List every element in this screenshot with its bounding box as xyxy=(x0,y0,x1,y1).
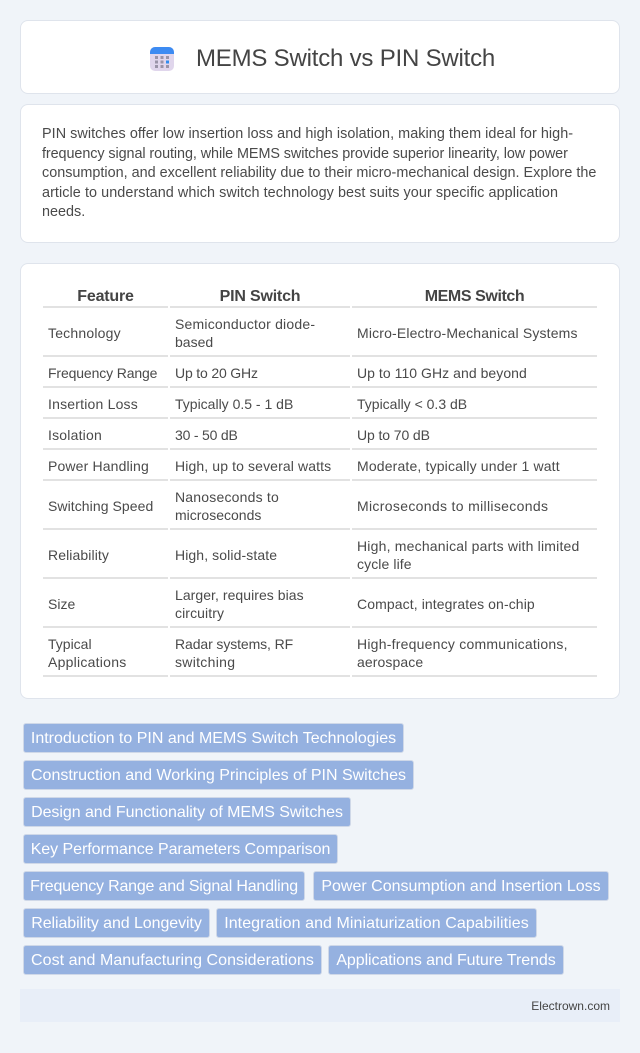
comparison table: Compact, integrates on-chip xyxy=(357,596,535,612)
chip: Design and Functionality of MEMS Switches xyxy=(31,804,343,821)
icon: calendar xyxy=(150,47,174,71)
row: power handling: Power Handling xyxy=(48,458,149,474)
comparison table: Radar systems, RF xyxy=(175,636,293,652)
chip xyxy=(216,908,537,938)
intro text: consumption, and excellent reliability due to their micro-mechanical design. Explore the xyxy=(42,165,596,181)
chip xyxy=(313,871,609,901)
intro text: needs. xyxy=(42,204,85,220)
chip: Power Consumption and Insertion Loss xyxy=(321,878,601,895)
row: typical applications xyxy=(48,636,126,670)
intro text: frequency signal routing, while MEMS switches provide superior linearity, low power xyxy=(42,146,568,162)
comparison table: High-frequency communications, xyxy=(357,636,568,652)
footer credit: Electrown.com xyxy=(531,999,610,1013)
chip xyxy=(23,945,322,975)
intro text: PIN switches offer low insertion loss and high isolation, making them ideal for high- xyxy=(42,126,573,142)
topic chips xyxy=(23,723,609,975)
title: MEMS Switch vs PIN Switch xyxy=(196,45,495,72)
comparison table: 30 - 50 dB xyxy=(175,427,238,443)
chip: Introduction to PIN and MEMS Switch Technologies xyxy=(31,730,396,747)
chip xyxy=(23,834,338,864)
comparison table: Micro-Electro-Mechanical Systems xyxy=(357,325,578,341)
row: size: Size xyxy=(48,596,75,612)
footer xyxy=(20,989,620,1022)
chip: Construction and Working Principles of PIN Switches xyxy=(31,767,406,784)
comparison table: circuitry xyxy=(175,605,224,621)
comparison table: Up to 110 GHz and beyond xyxy=(357,365,527,381)
row: isolation: Isolation xyxy=(48,427,102,443)
comparison table: Microseconds to milliseconds xyxy=(357,498,548,514)
row: switching speed: Switching Speed xyxy=(48,498,153,514)
chip: Key Performance Parameters Comparison xyxy=(31,841,330,858)
comparison table: Larger, requires bias xyxy=(175,587,304,603)
comparison table: High, mechanical parts with limited xyxy=(357,538,580,554)
comparison table: Moderate, typically under 1 watt xyxy=(357,458,560,474)
row: typical applications: Typical xyxy=(48,636,92,652)
chip: Frequency Range and Signal Handling xyxy=(30,878,298,895)
row: technology: Technology xyxy=(48,325,121,341)
intro text xyxy=(42,126,596,220)
chip xyxy=(23,723,404,753)
row: frequency range: Frequency Range xyxy=(48,365,157,381)
comparison table: PIN Switch xyxy=(220,288,300,305)
chip xyxy=(23,797,351,827)
comparison table: Nanoseconds to xyxy=(175,489,279,505)
chip xyxy=(23,871,305,901)
header card xyxy=(20,20,620,94)
intro card xyxy=(20,104,620,243)
comparison table xyxy=(43,288,597,677)
row: reliability: Reliability xyxy=(48,547,109,563)
row: typical applications: Applications xyxy=(48,654,126,670)
comparison table: High, solid-state xyxy=(175,547,277,563)
comparison table: Up to 70 dB xyxy=(357,427,430,443)
comparison table: High, up to several watts xyxy=(175,458,331,474)
chip xyxy=(328,945,564,975)
chip xyxy=(23,908,210,938)
comparison table: Typically 0.5 - 1 dB xyxy=(175,396,293,412)
comparison table: based xyxy=(175,334,213,350)
table header: Feature xyxy=(77,288,134,305)
chip: Applications and Future Trends xyxy=(336,952,556,969)
comparison table: aerospace xyxy=(357,654,423,670)
chip: Cost and Manufacturing Considerations xyxy=(31,952,314,969)
row: insertion loss: Insertion Loss xyxy=(48,396,138,412)
comparison table card xyxy=(20,263,620,699)
comparison table: cycle life xyxy=(357,556,412,572)
comparison table: Up to 20 GHz xyxy=(175,365,258,381)
comparison table: microseconds xyxy=(175,507,261,523)
chip: Reliability and Longevity xyxy=(31,915,202,932)
comparison table: switching xyxy=(175,654,235,670)
comparison table: Typically < 0.3 dB xyxy=(357,396,467,412)
chip xyxy=(23,760,414,790)
intro text: article to understand which switch technology best suits your specific application xyxy=(42,184,558,200)
comparison table: MEMS Switch xyxy=(425,288,524,305)
chip: Integration and Miniaturization Capabilities xyxy=(224,915,529,932)
comparison table: Semiconductor diode- xyxy=(175,316,315,332)
